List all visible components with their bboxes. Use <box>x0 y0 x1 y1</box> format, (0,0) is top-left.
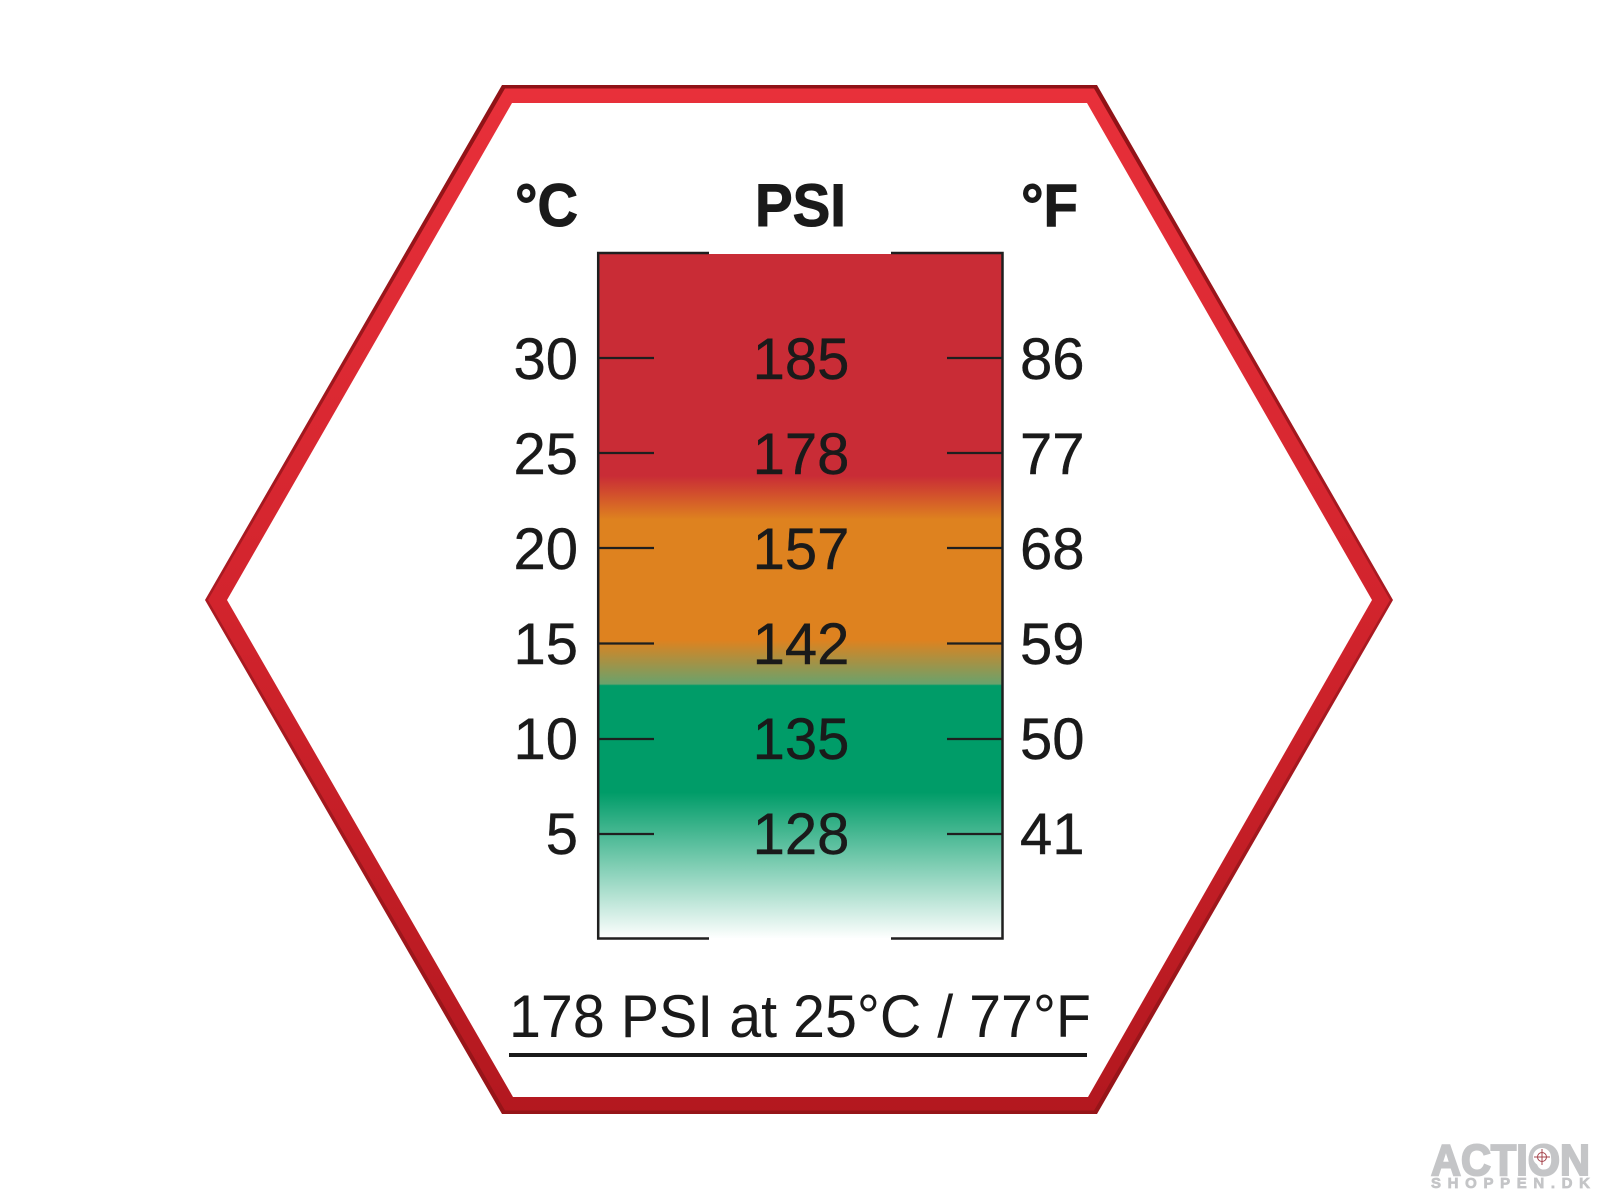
PSI values <box>753 327 849 867</box>
celsius scale: 10 <box>513 707 578 772</box>
PSI values: 142 <box>753 612 849 677</box>
heading: PSI: PSI <box>755 172 846 239</box>
heading: celsius: °C <box>515 172 578 239</box>
fahrenheit scale: 77 <box>1020 422 1085 487</box>
heading: fahrenheit: °F <box>1021 172 1078 239</box>
fahrenheit scale <box>1020 327 1085 867</box>
celsius scale: 30 <box>513 327 578 392</box>
celsius scale: 20 <box>513 517 578 582</box>
celsius scale <box>513 327 578 867</box>
icon: crosshair <box>1533 1148 1551 1166</box>
fahrenheit scale: 68 <box>1020 517 1085 582</box>
hexagon frame <box>205 85 1393 1114</box>
watermark logo: ACTION <box>1431 1136 1590 1185</box>
watermark logo: SHOPPEN.DK <box>1431 1175 1590 1192</box>
celsius scale: 5 <box>546 802 578 867</box>
celsius scale: 25 <box>513 422 578 487</box>
fahrenheit scale: 59 <box>1020 612 1085 677</box>
fahrenheit scale: 41 <box>1020 802 1085 867</box>
celsius scale: 15 <box>513 612 578 677</box>
gauge bar <box>598 253 1003 938</box>
recommended pressure note: 178 PSI at 25°C / 77°F <box>509 983 1091 1050</box>
PSI values: 185 <box>753 327 849 392</box>
PSI values: 128 <box>753 802 849 867</box>
PSI values: 178 <box>753 422 849 487</box>
PSI values: 157 <box>753 517 849 582</box>
fahrenheit scale: 50 <box>1020 707 1085 772</box>
PSI values: 135 <box>753 707 849 772</box>
fahrenheit scale: 86 <box>1020 327 1085 392</box>
